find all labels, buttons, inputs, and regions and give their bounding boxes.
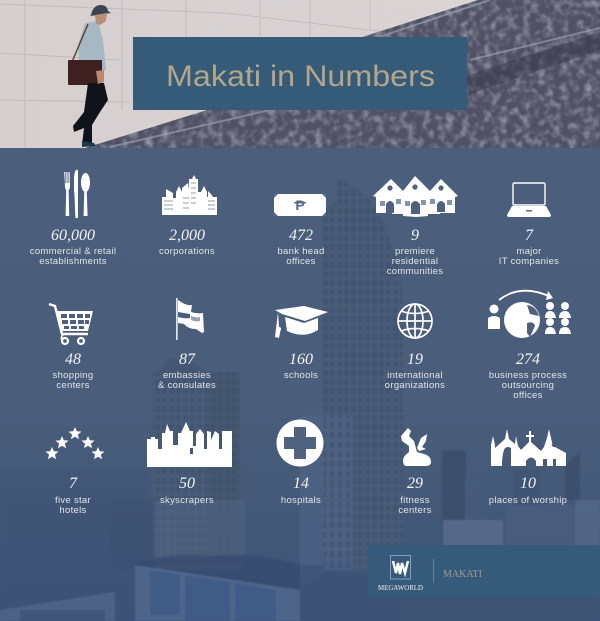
label: organizations bbox=[385, 380, 445, 391]
number: 50 bbox=[179, 475, 195, 492]
stat: 472 bank head offices bbox=[274, 194, 326, 267]
number: 10 bbox=[520, 475, 536, 492]
icon: skyline silhouette bbox=[147, 422, 232, 467]
icon: churches bbox=[491, 429, 566, 466]
label: hotels bbox=[59, 505, 87, 516]
number: 7 bbox=[69, 475, 78, 492]
label: hospitals bbox=[281, 495, 321, 506]
label: offices bbox=[286, 256, 316, 267]
number: 60,000 bbox=[51, 227, 95, 244]
label: establishments bbox=[39, 256, 107, 267]
stat: 7 five star hotels bbox=[46, 427, 104, 516]
stat: 60,000 commercial and retail establishments bbox=[30, 170, 116, 267]
number: 274 bbox=[516, 351, 540, 368]
stat: 50 skyscrapers bbox=[147, 422, 232, 506]
number: 14 bbox=[293, 475, 309, 492]
icon: outsourcing globe and people bbox=[488, 291, 571, 338]
number: 472 bbox=[289, 227, 313, 244]
background: low-rise buildings and trees bbox=[0, 555, 400, 621]
man walking bbox=[68, 5, 111, 147]
label: centers bbox=[56, 380, 90, 391]
number: 7 bbox=[525, 227, 534, 244]
background: skyline right bbox=[400, 450, 600, 621]
number: 9 bbox=[411, 227, 419, 244]
stat: 160 schools bbox=[275, 306, 328, 381]
background: skyline left bbox=[0, 470, 245, 621]
label: shopping bbox=[53, 370, 93, 381]
icon: row houses bbox=[373, 176, 458, 217]
logo: Megaworld: MEGAWORLD bbox=[378, 583, 424, 592]
icon: city bbox=[162, 175, 217, 215]
icon: five stars bbox=[46, 427, 104, 459]
label: corporations bbox=[159, 246, 215, 257]
number: 29 bbox=[407, 475, 423, 492]
label: bank head bbox=[277, 246, 325, 257]
footer brand bar bbox=[368, 545, 600, 597]
label: embassies bbox=[163, 370, 211, 381]
header photo bbox=[0, 0, 600, 148]
icon: cutlery bbox=[64, 170, 90, 218]
label: major bbox=[516, 246, 542, 257]
number: 19 bbox=[407, 351, 423, 368]
label: offices bbox=[513, 390, 543, 401]
stat: 87 embassies and consulates bbox=[158, 298, 216, 391]
label: outsourcing bbox=[502, 380, 554, 391]
stat: 2,000 corporations bbox=[159, 175, 217, 257]
label: five star bbox=[55, 495, 91, 506]
label: fitness bbox=[400, 495, 430, 506]
label: communities bbox=[387, 266, 443, 277]
title banner bbox=[133, 37, 467, 110]
label: IT companies bbox=[499, 256, 559, 267]
icon: laptop bbox=[507, 183, 551, 217]
icon: flag bbox=[176, 298, 204, 340]
label: centers bbox=[398, 505, 432, 516]
icon: fitness figure bbox=[401, 428, 431, 466]
icon: shopping cart bbox=[49, 304, 93, 344]
label: international bbox=[387, 370, 443, 381]
icon: globe bbox=[398, 304, 432, 338]
stat: 10 places of worship bbox=[489, 429, 567, 506]
icon: peso banknote: P bbox=[295, 197, 305, 213]
label: & consulates bbox=[158, 380, 216, 391]
stat: 14 hospitals bbox=[276, 420, 324, 506]
stat: 29 fitness centers bbox=[398, 428, 432, 516]
title: Makati in Numbers bbox=[166, 60, 435, 93]
brand name: Makati: MAKATI bbox=[443, 568, 482, 580]
label: business process bbox=[489, 370, 567, 381]
label: commercial & retail bbox=[30, 246, 116, 257]
stat: 48 shopping centers bbox=[49, 304, 93, 391]
stat: 19 international organizations bbox=[385, 304, 445, 391]
background: central tower bbox=[300, 180, 403, 570]
number: 160 bbox=[289, 351, 313, 368]
label: premiere bbox=[395, 246, 435, 257]
number: 48 bbox=[65, 351, 81, 368]
number: 87 bbox=[179, 351, 196, 368]
label: residential bbox=[392, 256, 438, 267]
background: left tower bbox=[152, 358, 240, 572]
icon: graduation cap bbox=[275, 306, 328, 338]
logo: Megaworld bbox=[378, 556, 424, 592]
number: 2,000 bbox=[169, 227, 205, 244]
label: schools bbox=[284, 370, 318, 381]
label: skyscrapers bbox=[160, 495, 214, 506]
stat: 9 premiere residential communities bbox=[373, 176, 458, 277]
stat: 7 major IT companies bbox=[499, 183, 559, 267]
label: places of worship bbox=[489, 495, 567, 506]
body background panel bbox=[0, 148, 600, 621]
stat: 274 business process outsourcing offices bbox=[488, 291, 571, 401]
icon: medical cross bbox=[276, 420, 324, 466]
